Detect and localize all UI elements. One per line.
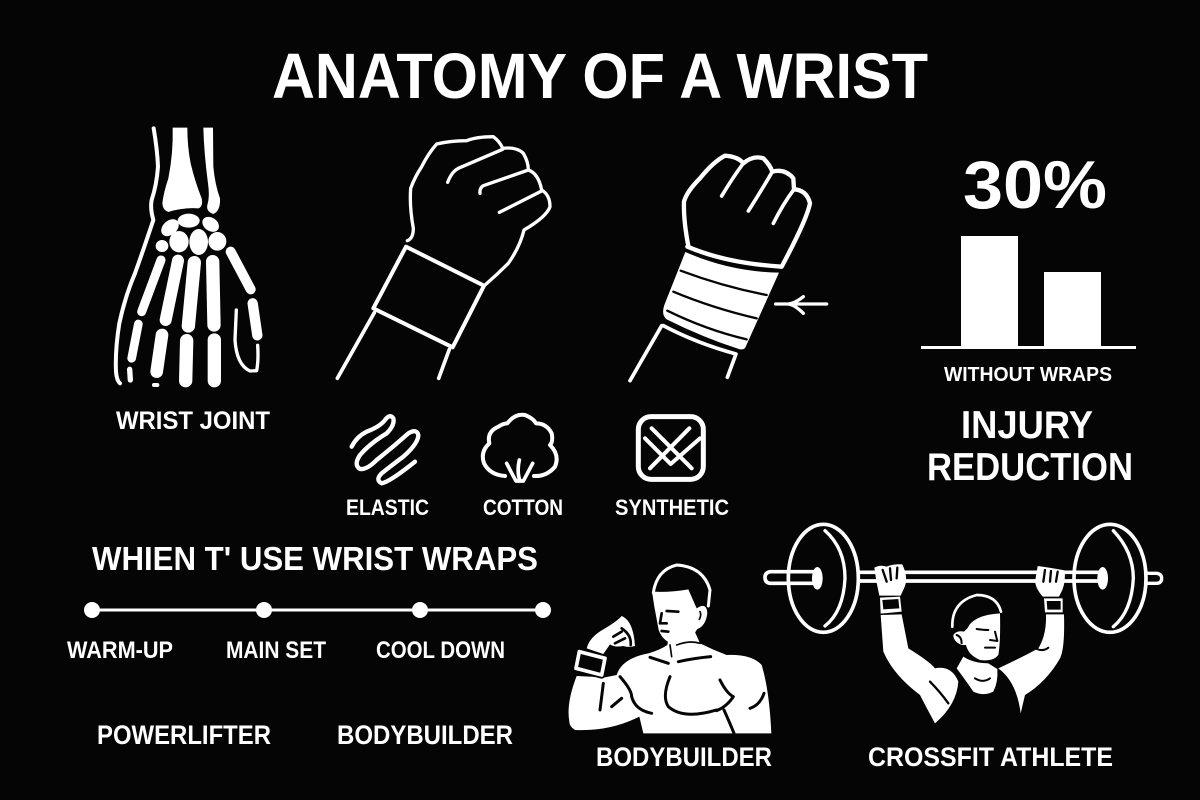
bar chart (921, 236, 1136, 349)
title: ANATOMY OF A WRIST (272, 40, 928, 112)
timeline (84, 602, 551, 618)
wrist wrap (576, 652, 605, 675)
figure: athlete with barbell (765, 524, 1162, 723)
label: bodybuilder: BODYBUILDER (596, 742, 772, 772)
icon: synthetic (638, 417, 703, 479)
panel: wrist joint (116, 128, 270, 435)
label: warm-up: WARM-UP (67, 637, 173, 664)
label: crossfit athlete: CROSSFIT ATHLETE (868, 742, 1113, 772)
heading: injury reduction: INJURY (961, 404, 1093, 447)
heading: injury reduction: REDUCTION (927, 446, 1133, 489)
label: wrist joint: WRIST JOINT (116, 407, 270, 435)
icon: fist with wrapped wrist (630, 156, 827, 381)
heading: when to use: WHIEN T' USE WRIST WRAPS (92, 540, 538, 577)
panel: bodybuilder (569, 565, 772, 772)
panel: injury reduction (921, 147, 1136, 489)
label: without wraps: WITHOUT WRAPS (944, 364, 1112, 386)
icon: elastic (352, 416, 418, 483)
label: powerlifter: POWERLIFTER (97, 720, 271, 750)
figure: bodybuilder (569, 565, 771, 733)
label: bodybuilder: BODYBUILDER (337, 720, 513, 750)
icon: fist with wrist band (337, 137, 550, 378)
label: elastic: ELASTIC (346, 495, 429, 520)
label: cool down: COOL DOWN (376, 637, 505, 664)
icon: cotton (483, 415, 557, 481)
hands (874, 564, 1065, 597)
panel: when to use (67, 540, 551, 750)
label: cotton: COTTON (483, 495, 563, 520)
label: main set: MAIN SET (226, 637, 326, 664)
panel: crossfit athlete (765, 524, 1162, 772)
arrow: pointing at wrap (776, 297, 827, 313)
stat: 30%: 30% (963, 147, 1107, 223)
icon: wrist skeleton (116, 128, 258, 385)
wrist wraps (880, 597, 1063, 614)
barbell (765, 524, 1162, 632)
panel: materials (346, 415, 729, 520)
label: synthetic: SYNTHETIC (615, 495, 729, 520)
